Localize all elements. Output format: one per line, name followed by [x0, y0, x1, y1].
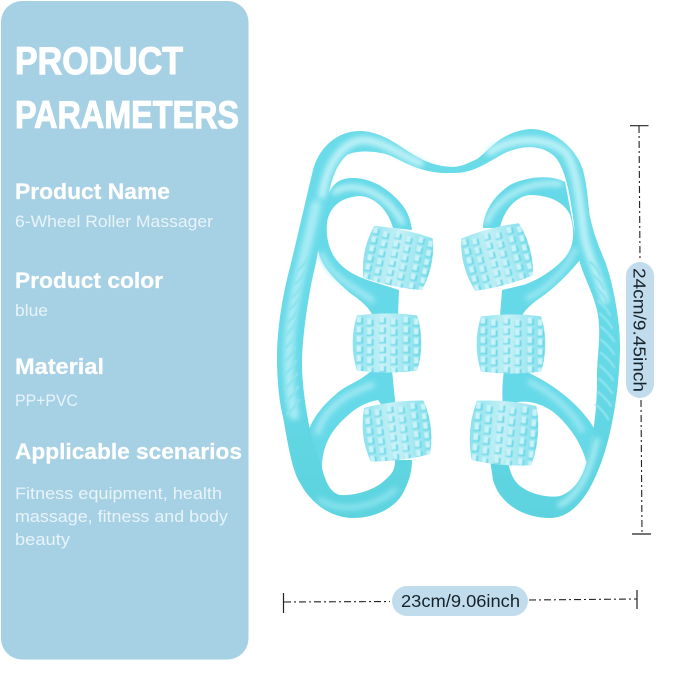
spec: applicable scenarios: beauty	[15, 530, 71, 549]
height dimension: 24cm/9.45inch	[626, 126, 654, 534]
spec: product color: Product color	[15, 268, 163, 293]
title	[15, 40, 239, 137]
roller: left middle	[353, 313, 421, 375]
frame highlights	[289, 140, 605, 507]
roller: left bottom	[360, 398, 435, 466]
outer frame: left half	[277, 131, 452, 518]
title: PRODUCT	[15, 40, 183, 83]
roller: left top	[358, 223, 437, 295]
right inner loops	[483, 177, 594, 464]
spec: product name: 6-Wheel Roller Massager	[15, 213, 214, 231]
spec: applicable scenarios: Applicable scenarios	[15, 439, 242, 464]
product: 6-wheel roller massager	[277, 129, 620, 518]
spec: material	[15, 354, 104, 410]
spec: product name	[15, 179, 214, 231]
width dimension: 23cm/9.06inch: 23cm/9.06inch	[401, 591, 520, 611]
spec: applicable scenarios: Fitness equipment, health	[15, 484, 222, 503]
right grip ribs	[590, 262, 614, 419]
outer frame: right half	[452, 129, 620, 518]
spec: applicable scenarios	[15, 439, 242, 549]
spec: material: Material	[15, 354, 104, 379]
roller: right middle	[477, 314, 545, 376]
spec: applicable scenarios: massage, fitness and body	[15, 507, 229, 526]
spec: product name: Product Name	[15, 179, 170, 204]
title: PARAMETERS	[15, 94, 239, 137]
left grip ribs	[284, 257, 308, 414]
panel: product parameters	[1, 1, 248, 660]
height dimension: 24cm/9.45inch: 24cm/9.45inch	[630, 268, 650, 392]
roller: right top	[457, 220, 538, 296]
roller: right bottom	[467, 398, 541, 470]
width dimension: 23cm/9.06inch	[284, 586, 637, 616]
left inner loops	[308, 178, 412, 468]
spec: product color	[15, 268, 163, 320]
spec: product color: blue	[15, 302, 48, 320]
spec: material: PP+PVC	[15, 392, 78, 410]
